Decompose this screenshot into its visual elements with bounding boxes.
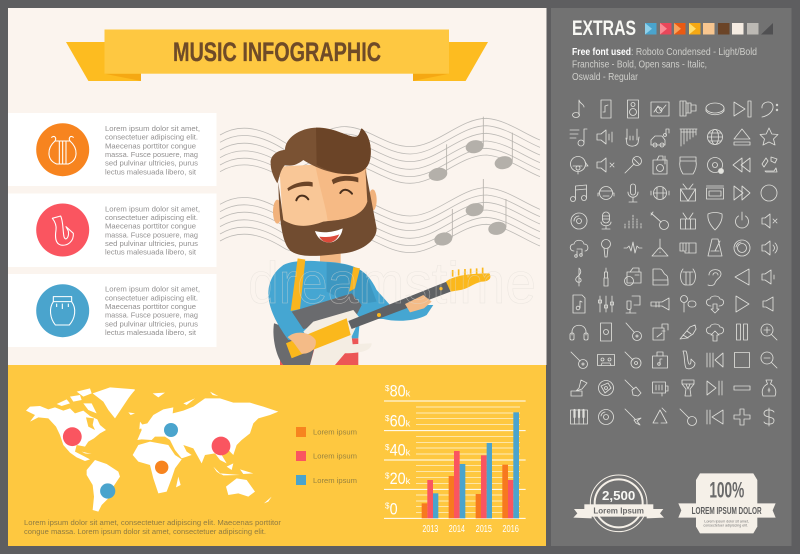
bar chart: k [406, 476, 411, 486]
legend: Lorem ipsum [313, 428, 357, 436]
text block 3: massa. Fusce posuere, mag [105, 311, 198, 320]
mouth [315, 228, 343, 242]
badge: 100%: consectetuer adipiscing elit. [703, 524, 748, 528]
text block 1: lectus malesuada libero, sit [105, 167, 196, 176]
bar chart: $ [385, 384, 390, 393]
icon: keyboard case [680, 243, 696, 253]
icon: jack [604, 268, 608, 286]
icon: electric guitar [625, 380, 641, 396]
icon: acoustic guitar 2 [571, 352, 588, 368]
bar chart: 60 [390, 412, 406, 431]
icon: cloud note [570, 240, 588, 257]
icon: zoom in [761, 324, 777, 340]
icon: play [736, 296, 749, 312]
ears [273, 200, 282, 224]
text block 2 [105, 204, 200, 257]
map caption: congue massa. Lorem ipsum dolor sit amet, consectetuer adipiscing elit. [24, 527, 266, 536]
colour swatches [645, 23, 773, 34]
icon: phone note [601, 100, 611, 118]
bar chart: $ [385, 502, 390, 511]
badge: 100%: LOREM IPSUM DOLOR [692, 506, 762, 517]
text block 3 [105, 285, 200, 337]
icon: next [734, 101, 751, 117]
bar chart: $ [385, 471, 390, 480]
map caption [24, 518, 281, 536]
icon: play pause [707, 381, 722, 395]
legend: Lorem ipsum [313, 452, 357, 460]
icon: volume up [762, 241, 777, 255]
panel: extras [551, 8, 792, 546]
guitar neck [348, 282, 451, 329]
legend [296, 427, 357, 485]
bar chart: 2015 [476, 524, 492, 535]
text block 1: sed pulvinar ultricies, purus [105, 159, 198, 168]
icon: gramophone [571, 380, 587, 396]
icon: amp [652, 382, 668, 396]
beard [278, 168, 377, 256]
font credit text: Free font used [572, 46, 631, 58]
icon: trumpet [651, 298, 669, 310]
icon: balalaika [652, 239, 668, 256]
icon grid [570, 100, 778, 426]
icon: lyre circle [36, 123, 89, 176]
icon: speaker disc [734, 240, 750, 256]
text block 3: lectus malesuada libero, sit [105, 328, 196, 337]
icon: recycle [762, 157, 777, 172]
icon: power [736, 212, 748, 228]
icon: headset [598, 186, 614, 200]
bar chart: $ [385, 414, 390, 423]
text block 3: consectetuer adipiscing elit. [105, 293, 198, 302]
icon: conga [680, 157, 696, 174]
bar chart: $ [385, 443, 390, 452]
bar chart: 20 [390, 469, 406, 488]
icon: radio [706, 186, 724, 199]
icon: boombox [624, 268, 641, 286]
icon: metronome [708, 239, 722, 256]
icon: piano keys [570, 410, 588, 424]
pickguard [286, 318, 351, 358]
icon: piano [653, 269, 668, 285]
bar chart: 80 [390, 382, 406, 401]
icon: accordion [680, 101, 696, 116]
font credit text: Franchise - Bold, Open sans - Italic, [572, 58, 707, 70]
icon: notes frame [653, 324, 668, 340]
title ribbon [66, 30, 488, 81]
icon: stand note [626, 296, 640, 313]
icon: forward [734, 186, 750, 200]
neck [320, 250, 341, 265]
card: lyre [8, 113, 216, 186]
bar chart: 0 [390, 499, 398, 518]
icon: cloud upload [706, 324, 724, 341]
musician illustration [268, 128, 490, 365]
card: saxophone [8, 194, 216, 267]
bar chart: 2013 [422, 524, 439, 535]
legend: Lorem ipsum [313, 476, 357, 485]
icon: stop [734, 352, 750, 368]
headstock [446, 273, 490, 292]
icon: tablet speaker [600, 323, 612, 341]
icon: headphones globe [651, 186, 669, 200]
map markers [63, 423, 230, 499]
badge: 100%: Lorem ipsum dolor sit amet, [704, 520, 749, 524]
text block 2: massa. Fusce posuere, mag [105, 230, 198, 239]
icon: mandolin [625, 352, 641, 368]
icon: v guitar [625, 409, 641, 425]
icon: studio mic [601, 212, 611, 229]
icon: speaker [762, 270, 774, 284]
font credit text [572, 46, 757, 83]
icon: pause [736, 324, 748, 340]
icon: note [572, 100, 584, 118]
icon: music file [573, 295, 585, 313]
icon: star [760, 128, 778, 145]
bar chart: k [406, 419, 411, 429]
icon: picture [651, 102, 669, 116]
icon: disc sticker [598, 380, 614, 396]
extras heading: EXTRAS [572, 17, 636, 40]
icon: bag note [652, 352, 668, 368]
icon: drum set [680, 213, 696, 229]
guitar strap [292, 293, 362, 329]
icon: guitar [626, 323, 642, 340]
icon: pipes [680, 129, 697, 146]
icon: headphones [570, 325, 588, 340]
icon: disc [571, 213, 587, 229]
text block 1: consectetuer adipiscing elit. [105, 133, 198, 142]
icon: hand mic [602, 240, 610, 257]
text block 1: Lorem ipsum dolor sit amet, [105, 124, 200, 133]
icon: treble clef [576, 268, 581, 286]
icon: mute 2 [762, 214, 777, 228]
icon: globe [708, 130, 722, 144]
icon: eject [734, 129, 750, 145]
bar chart: k [406, 389, 411, 399]
icon: cloud download [706, 296, 724, 313]
icon: equalizer [625, 214, 641, 228]
icon: playlist note [570, 129, 587, 146]
badge: 2,500 [573, 475, 664, 532]
card: drum [8, 274, 216, 347]
icon: previous [707, 410, 723, 424]
icon: rewind [733, 158, 750, 172]
icon: plus [734, 409, 750, 425]
world map [26, 387, 278, 512]
text block 3: Lorem ipsum dolor sit amet, [105, 285, 200, 294]
suspenders [291, 258, 360, 311]
bar chart: 2014 [449, 524, 465, 535]
icon: ring [761, 185, 777, 201]
text block 2: sed pulvinar ultricies, purus [105, 239, 198, 248]
text block 1: Maecenas porttitor congue [105, 141, 196, 150]
font credit text: Oswald - Regular [572, 71, 638, 83]
icon: waveform [624, 242, 642, 253]
music staves and notes [220, 117, 540, 253]
watermark: dreamstime [248, 251, 536, 316]
icon: microphone [625, 156, 642, 173]
badge: 2,500: 2,500 [602, 488, 635, 503]
icon: triangle left [735, 269, 749, 285]
icon: mic speech [680, 296, 696, 312]
panel: main cream area [8, 8, 546, 365]
text block 2: consectetuer adipiscing elit. [105, 213, 198, 222]
title: MUSIC INFOGRAPHIC [173, 37, 381, 67]
text block 1: massa. Fusce posuere, mag [105, 150, 198, 159]
badge: 100% [678, 473, 776, 533]
icon: rock hand [626, 129, 639, 146]
icon: triangle [653, 408, 667, 423]
icon: snare drum [680, 184, 696, 201]
icon: compact disc [598, 410, 614, 424]
bar chart: 2016 [502, 524, 519, 535]
hair [271, 128, 371, 183]
icon: minus [734, 386, 750, 390]
text block 2: Maecenas porttitor congue [105, 222, 196, 231]
icon: mute [597, 158, 614, 172]
icon: cd badge [708, 158, 724, 174]
panel: yellow data area [8, 365, 546, 546]
bar chart: k [406, 448, 411, 458]
icon: acoustic guitar [651, 212, 668, 230]
icon: car note [651, 129, 669, 147]
icon: turntable [653, 156, 667, 174]
bar chart: 40 [390, 441, 406, 460]
hands [405, 295, 432, 312]
icon: double note [570, 185, 586, 202]
font credit text: : Roboto Condensed - Light/Bold [631, 46, 757, 58]
pants and back of guitar [280, 338, 358, 365]
icon: banjo [680, 409, 696, 426]
icon: zoom out [761, 352, 777, 368]
icon: money bag [762, 380, 776, 396]
icon: volume both [597, 130, 612, 144]
text block 2: lectus malesuada libero, sit [105, 248, 196, 257]
guitar body [303, 310, 372, 365]
icon: sax [683, 351, 695, 369]
text block 3: Maecenas porttitor congue [105, 302, 196, 311]
icon: speaker [628, 100, 638, 118]
icon: pick [708, 212, 722, 230]
icon: cassette [598, 354, 614, 366]
shirt [268, 261, 433, 340]
bar chart [384, 382, 526, 535]
icon: sliders [598, 296, 614, 312]
text block 2: Lorem ipsum dolor sit amet, [105, 204, 200, 213]
icon: drum circle [36, 284, 89, 337]
icon: head [570, 156, 588, 174]
eyebrows and eyes [287, 176, 358, 191]
text block 3: sed pulvinar ultricies, purus [105, 319, 198, 328]
badge: 2,500: Lorem Ipsum [593, 505, 644, 515]
icon: ear [708, 270, 721, 286]
icon: horn [680, 325, 696, 339]
map caption: Lorem ipsum dolor sit amet, consectetuer adipiscing elit. Maecenas porttitor [24, 518, 281, 527]
icon: lyre [681, 269, 695, 285]
icon: saxophone circle [36, 204, 89, 256]
icon: mic stand [628, 184, 638, 202]
icon: low volume [763, 297, 773, 311]
badge: 100%: 100% [709, 478, 744, 503]
icon: bass clef [762, 102, 778, 117]
icon: djembe [682, 380, 694, 396]
icon: tambourine [706, 103, 724, 115]
text block 1 [105, 124, 200, 176]
icon: dollar [764, 408, 774, 426]
face [279, 162, 369, 233]
icon: previous pause [707, 353, 723, 367]
